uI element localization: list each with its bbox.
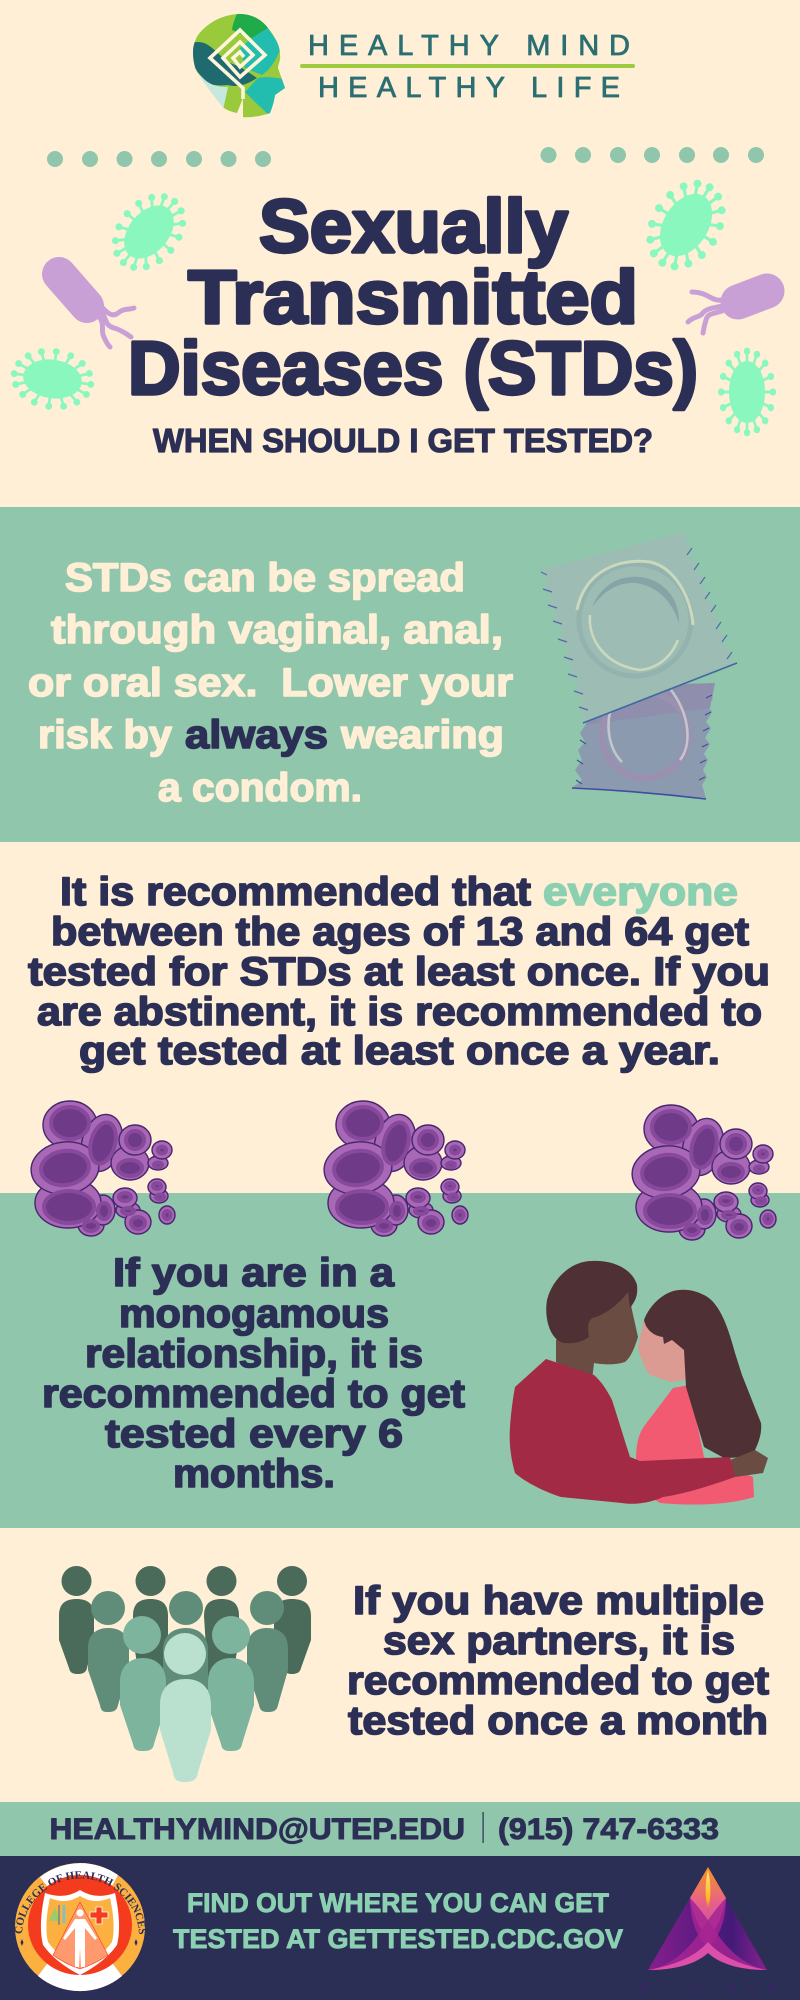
- icon: group of people: [59, 1566, 311, 1782]
- text: find out where to get tested: FIND OUT WHERE YOU CAN GET: [187, 1888, 609, 1918]
- title: [128, 184, 698, 410]
- woman's hair: [644, 1290, 761, 1458]
- man's shirt: [510, 1359, 735, 1504]
- text: everyone recommendation: [28, 870, 770, 1073]
- man's hand: [730, 1450, 768, 1477]
- text: Aliviane: ALIVIANE: [640, 1982, 775, 1994]
- icon: purple cells right: [629, 1105, 776, 1240]
- icon: purple cells left: [28, 1101, 175, 1236]
- dots: right row: [540, 147, 764, 163]
- icon: condom packets: [540, 532, 737, 799]
- logo text: Healthy Mind: HEALTHY MIND: [308, 30, 630, 62]
- icon: head logo: [193, 14, 285, 118]
- logo text: Healthy Life: HEALTHY LIFE: [318, 72, 620, 104]
- text: multiple partners recommendation: If you have multiple: [353, 1579, 764, 1623]
- icon: green germ lower left: [10, 346, 95, 412]
- icon: College of Health Sciences seal: COLLEGE OF HEALTH SCIENCES: [15, 1871, 145, 1934]
- text: condom advice: a condom.: [158, 766, 362, 810]
- icon: green germ upper left: [102, 183, 196, 281]
- text: phone: (915) 747-6333: [498, 1813, 719, 1846]
- man's hair: [546, 1261, 637, 1343]
- text: monogamous recommendation: monogamous: [119, 1292, 389, 1336]
- icon: green germ upper right: [635, 170, 737, 280]
- logo: Healthy Mind Healthy Life: [190, 10, 635, 122]
- text: multiple partners recommendation: recommended to get: [347, 1659, 769, 1703]
- text: find out where to get tested: TESTED AT GETTESTED.CDC.GOV: [173, 1924, 623, 1954]
- logo divider: [300, 64, 635, 68]
- panel: monogamous relationship: [0, 1193, 800, 1528]
- text: everyone recommendation: tested for STDs at least once. If you: [28, 950, 770, 994]
- text: find out where to get tested: [173, 1888, 623, 1954]
- text: condom advice: or oral sex. Lower your: [28, 661, 513, 705]
- text: everyone recommendation: are abstinent, it is recommended to: [37, 990, 762, 1034]
- text: everyone recommendation: everyone: [543, 870, 738, 914]
- woman's face: [638, 1320, 690, 1382]
- panel: contact bar: [0, 1802, 800, 1856]
- text: everyone recommendation: between the ages of 13 and 64 get: [51, 910, 749, 954]
- icon: purple bacillus left: [59, 274, 134, 347]
- text: condom advice: always: [185, 713, 328, 757]
- man's neck and face: [556, 1292, 638, 1380]
- text: monogamous recommendation: relationship, it is: [85, 1332, 423, 1376]
- text: everyone recommendation: get tested at least once a year.: [79, 1029, 720, 1073]
- divider: [482, 1812, 484, 1843]
- text: condom advice: STDs can be spread: [65, 556, 465, 600]
- lower packet: [572, 683, 715, 798]
- icon: Aliviane logo: [640, 1867, 775, 1994]
- text: monogamous recommendation: If you are in a: [113, 1251, 395, 1295]
- title: Transmitted: [188, 255, 638, 339]
- dots: left row: [47, 151, 271, 167]
- title: Diseases (STDs): [128, 326, 698, 410]
- icon: College of Health Sciences seal: [15, 1863, 145, 1992]
- woman's top: [636, 1385, 754, 1505]
- text: monogamous recommendation: tested every 6: [105, 1412, 403, 1456]
- upper packet: [540, 532, 737, 723]
- icon: purple bacillus right: [688, 291, 767, 333]
- text: monogamous recommendation: months.: [173, 1452, 335, 1496]
- text: everyone recommendation: It is recommended that: [60, 870, 531, 914]
- text: monogamous recommendation: [42, 1251, 465, 1496]
- icon: purple cells center: [321, 1101, 468, 1236]
- text: multiple partners recommendation: sex partners, it is: [383, 1619, 735, 1663]
- text: condom advice: through vaginal, anal,: [51, 608, 503, 652]
- subtitle: WHEN SHOULD I GET TESTED?: [153, 422, 653, 459]
- panel: footer: [0, 1856, 800, 2000]
- icon: embracing couple: [510, 1261, 768, 1505]
- text: condom advice: wearing: [340, 713, 504, 757]
- panel: condom advice: [0, 507, 800, 842]
- text: condom advice: risk by: [38, 713, 173, 757]
- text: multiple partners recommendation: [347, 1579, 769, 1743]
- text: email: HEALTHYMIND@UTEP.EDU: [50, 1813, 465, 1846]
- text: multiple partners recommendation: tested once a month: [348, 1699, 768, 1743]
- icon: green germ lower right: [721, 351, 773, 433]
- text: monogamous recommendation: recommended to get: [42, 1372, 465, 1416]
- title: Sexually: [259, 184, 568, 268]
- text: condom advice: [28, 556, 513, 810]
